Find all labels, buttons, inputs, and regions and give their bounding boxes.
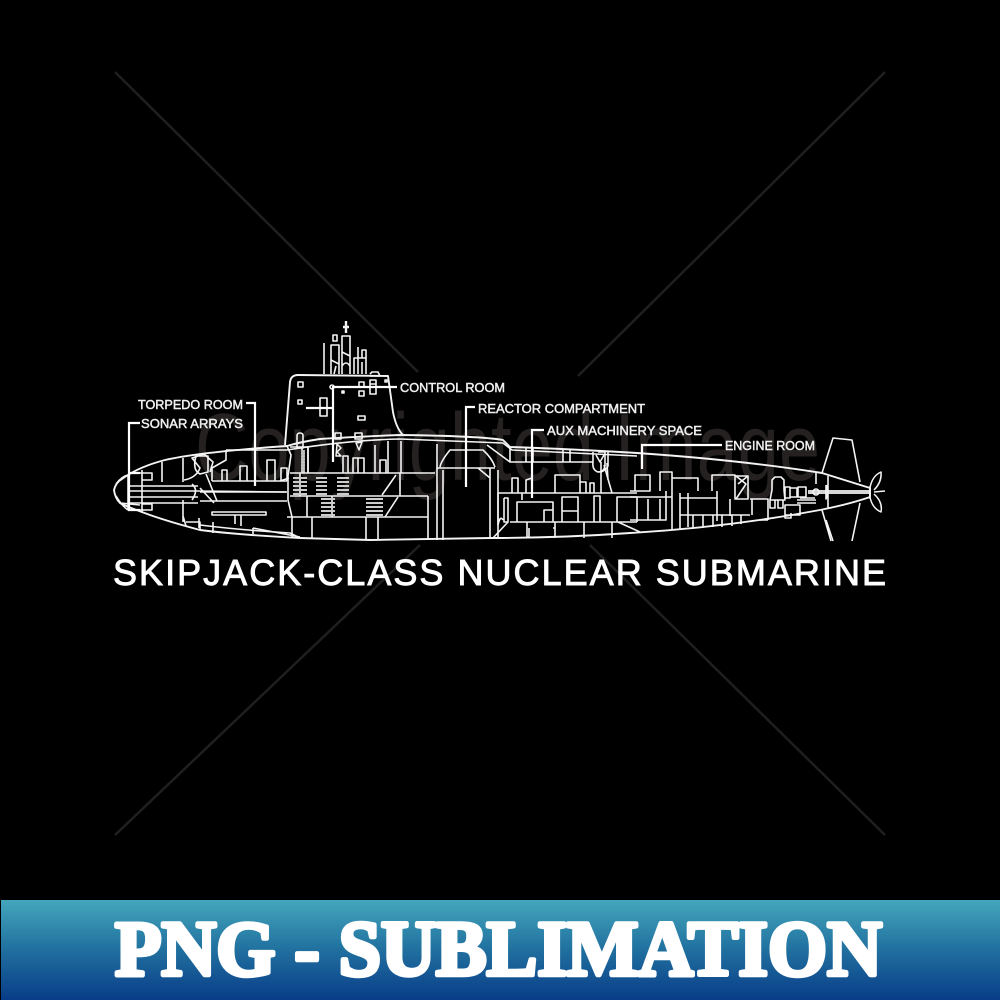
label: sonar arrays: SONAR ARRAYS bbox=[141, 417, 243, 431]
watermark: diagonal cross lines bbox=[115, 72, 885, 835]
stairs bbox=[293, 478, 383, 515]
reactor compartment bbox=[437, 445, 510, 538]
label: torpedo room: TORPEDO ROOM bbox=[138, 398, 243, 412]
label: reactor compartment: REACTOR COMPARTMENT bbox=[478, 402, 645, 416]
inner hull line bbox=[120, 439, 637, 538]
propeller bbox=[870, 472, 885, 512]
midships decks bbox=[287, 441, 443, 540]
propeller shaft bbox=[797, 473, 870, 508]
engine room bbox=[630, 472, 815, 530]
tail rudder bbox=[822, 438, 860, 541]
label: control room: CONTROL ROOM bbox=[400, 381, 505, 395]
banner bbox=[1, 900, 1000, 1000]
watermark: copyrighted image text: Copyrighted Image bbox=[195, 394, 820, 501]
label: engine room: ENGINE ROOM bbox=[725, 439, 815, 453]
bow section bbox=[116, 446, 308, 537]
sail and masts bbox=[285, 321, 403, 448]
title: SKIPJACK-CLASS NUCLEAR SUBMARINE bbox=[113, 552, 886, 593]
callout labels bbox=[138, 381, 815, 453]
callout leader lines bbox=[129, 387, 722, 510]
auxiliary machinery bbox=[493, 447, 640, 538]
hull outline bbox=[114, 435, 870, 540]
submarine cutaway diagram bbox=[114, 321, 885, 541]
label: aux machinery space: AUX MACHINERY SPACE bbox=[547, 424, 702, 438]
banner text: PNG - SUBLIMATION bbox=[115, 905, 882, 992]
